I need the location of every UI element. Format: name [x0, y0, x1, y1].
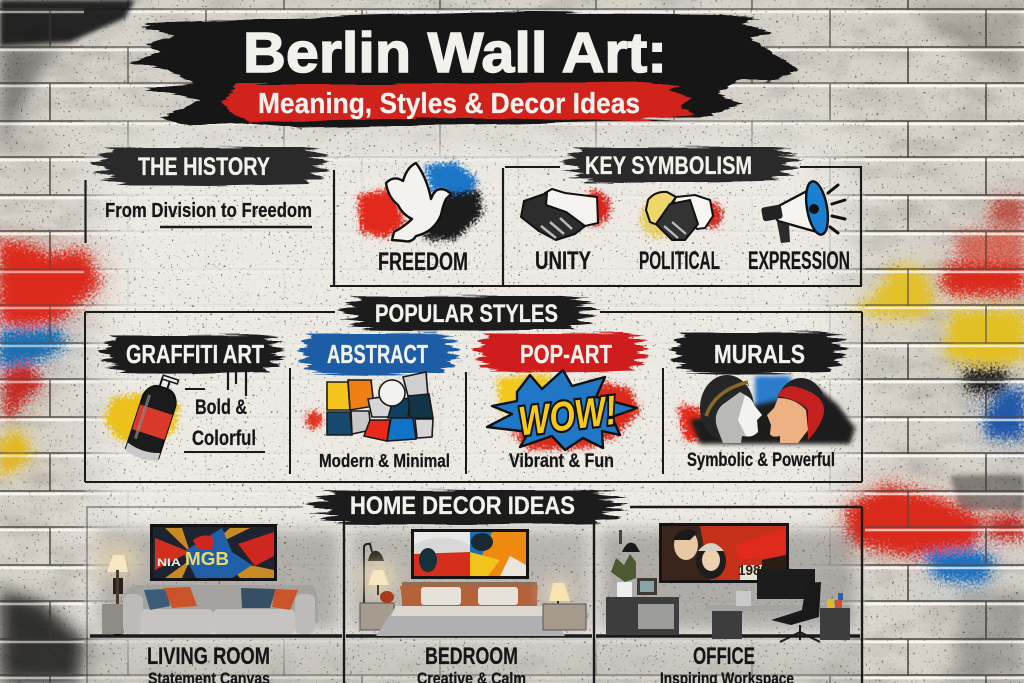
panel: living room: [94, 524, 318, 683]
icon: paint splash behind dove: [358, 162, 482, 240]
description: bold and colorful: [192, 396, 256, 450]
heading: popular styles: [335, 296, 601, 331]
bedside lamp right: [540, 576, 576, 608]
nightstand right: [543, 604, 586, 630]
description: bold and colorful: Colorful: [192, 427, 256, 450]
title text: Berlin Wall Art:: [243, 21, 667, 85]
description: bold and colorful: Bold &: [195, 396, 247, 419]
wall lamp: [364, 544, 384, 605]
icon: spray can: [124, 371, 183, 463]
icon: wow burst: [487, 370, 637, 450]
description: vibrant and fun: Vibrant & Fun: [509, 451, 614, 472]
heading: key symbolism: [558, 147, 802, 183]
label: unity: UNITY: [535, 247, 591, 275]
spray paint splashes: left side: [0, 240, 100, 476]
panel: murals: [668, 332, 855, 471]
icon: dove: [386, 163, 451, 241]
icon: megaphone: [761, 180, 845, 243]
panel: freedom: [358, 162, 482, 276]
panel: the history: [90, 147, 332, 222]
wall lamp: [619, 530, 640, 552]
icon: abstract painting: [327, 372, 433, 441]
flowers: [380, 591, 394, 603]
icon: right face: [767, 378, 825, 443]
heading: graffiti art: GRAFFITI ART: [126, 339, 264, 369]
panel: bedroom: [358, 529, 586, 683]
label: living room: LIVING ROOM: [147, 643, 270, 670]
cabinet: [606, 578, 679, 635]
desk accessories: [827, 593, 843, 608]
icon: red spray: [306, 411, 322, 429]
painting: statement canvas: NIA: [157, 557, 181, 569]
heading: abstract: ABSTRACT: [327, 339, 428, 369]
heading: home decor ideas: HOME DECOR IDEAS: [350, 492, 575, 520]
floor lamp: [94, 538, 142, 636]
heading: murals: [668, 332, 849, 374]
painting: creative art: [411, 529, 529, 579]
heading: home decor ideas: [303, 490, 631, 525]
heading: murals: MURALS: [714, 339, 805, 369]
frame lines: [85, 166, 862, 683]
heading: popular styles: POPULAR STYLES: [375, 300, 558, 328]
subtitle red brush stroke: [222, 82, 694, 122]
icon: political handshake: [640, 192, 722, 240]
desk: [706, 591, 850, 640]
subtitle text: Meaning, Styles & Decor Ideas: [258, 88, 640, 120]
heading: the history: [90, 147, 332, 186]
sofa: [123, 585, 318, 634]
icon: paint behind burst: [497, 374, 640, 450]
description: symbolic and powerful: Symbolic & Powerful: [687, 450, 835, 471]
title black brush stroke: [130, 12, 800, 128]
panel: key symbolism: [521, 147, 850, 275]
icon: yellow spray: [104, 392, 180, 445]
panel: abstract: [296, 333, 461, 471]
painting: inspiring portrait: 1989: [738, 562, 768, 579]
panel: graffiti art: [98, 335, 286, 463]
heading: abstract: [296, 333, 461, 375]
office chair: [771, 582, 821, 642]
title banner: [130, 12, 800, 128]
label: freedom: FREEDOM: [378, 248, 468, 276]
description: modern and minimal: Modern & Minimal: [319, 450, 450, 471]
heading: the history: THE HISTORY: [138, 153, 270, 181]
heading: graffiti art: [98, 335, 286, 374]
label: office: OFFICE: [693, 643, 755, 670]
icon: left face: [700, 375, 762, 443]
label: bedroom: BEDROOM: [425, 643, 518, 670]
plant: [611, 554, 636, 597]
icon: wow burst: WOW!: [516, 387, 619, 444]
heading: pop-art: POP-ART: [520, 339, 612, 369]
icon: mural backdrop: [678, 376, 855, 444]
bed: [376, 582, 565, 636]
monitor: [757, 569, 815, 599]
label: expression: EXPRESSION: [748, 247, 850, 275]
heading: key symbolism: KEY SYMBOLISM: [585, 152, 752, 180]
history subtitle: From Division to Freedom: [105, 200, 312, 222]
nightstand left: [360, 603, 394, 630]
heading: pop-art: [472, 333, 650, 373]
room wall shading: [90, 530, 860, 683]
spray paint splashes: right side: [845, 198, 1024, 582]
panel: office: [606, 523, 850, 683]
bedside lamp left: [358, 558, 398, 598]
label: political: POLITICAL: [639, 247, 720, 275]
painting: inspiring portrait: [659, 523, 789, 583]
icon: unity handshake: [521, 189, 610, 240]
painting: statement canvas: MGB: [185, 549, 229, 569]
painting: statement canvas: [150, 524, 277, 581]
panel: pop-art: [472, 333, 650, 472]
